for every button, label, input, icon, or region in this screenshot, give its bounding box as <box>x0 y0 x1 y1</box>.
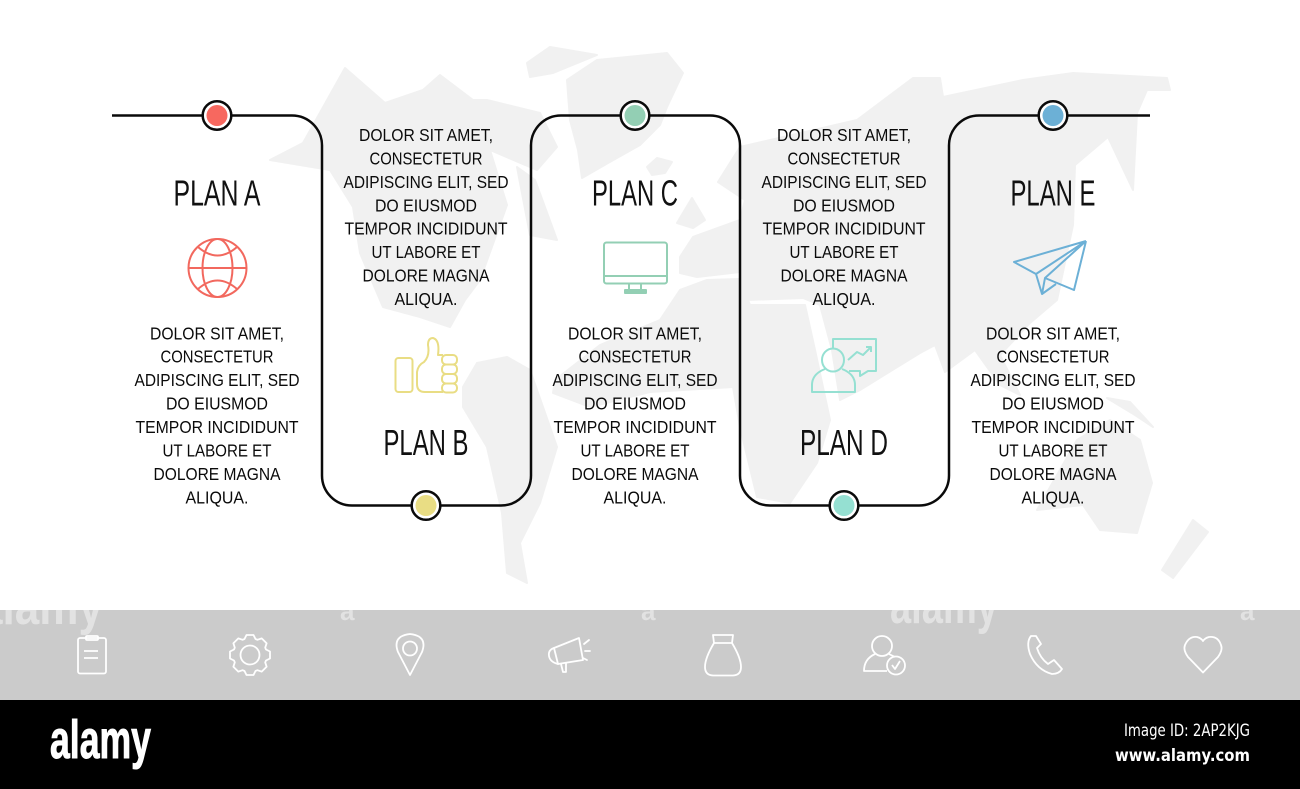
text block: plan C: ADIPISCING ELIT, SED <box>552 370 718 390</box>
text block: plan D: UT LABORE ET <box>790 242 899 262</box>
panel: plan B <box>344 125 508 520</box>
bottom icon band <box>0 610 1300 700</box>
icon: globe <box>188 239 246 297</box>
icon: heart <box>1184 637 1222 672</box>
text block: plan C: DOLOR SIT AMET, <box>568 323 702 343</box>
text block: plan E: UT LABORE ET <box>998 440 1108 460</box>
text block: plan B: ALIQUA. <box>394 289 458 309</box>
text block: plan A: CONSECTETUR <box>160 347 274 367</box>
text block: plan C: CONSECTETUR <box>578 347 692 367</box>
text block: plan A: DOLORE MAGNA <box>154 464 281 484</box>
text block: plan D: TEMPOR INCIDIDUNT <box>762 219 926 239</box>
icon: presenter with chart bubble <box>812 339 876 392</box>
text block: plan B: ADIPISCING ELIT, SED <box>344 172 508 192</box>
text block: plan E: DOLOR SIT AMET, <box>986 323 1120 343</box>
website: www.alamy.com <box>1115 746 1250 766</box>
text block: plan C: ALIQUA. <box>604 487 666 507</box>
text block: plan E: CONSECTETUR <box>996 347 1110 367</box>
footer bar <box>0 700 1300 789</box>
connecting timeline line <box>112 116 1150 506</box>
text block: plan B <box>344 125 508 309</box>
heading: plan E: PLAN E <box>1010 172 1096 214</box>
icon: gear <box>230 635 270 675</box>
icon: user with check <box>864 636 905 674</box>
icon: paper plane <box>1014 241 1086 294</box>
icon: phone <box>1028 636 1062 674</box>
marker: plan E <box>1039 101 1067 130</box>
icon: clipboard <box>78 636 106 674</box>
text block: plan D <box>762 125 926 309</box>
text block: plan D: DOLOR SIT AMET, <box>777 125 911 145</box>
text block: plan C: DO EIUSMOD <box>584 394 686 414</box>
heading: plan D: PLAN D <box>800 422 888 463</box>
watermark ghosts in band: alamy <box>890 577 998 635</box>
text block: plan D: ALIQUA. <box>812 289 876 309</box>
text block: plan A <box>134 323 300 507</box>
icon: thumbs up <box>396 338 457 392</box>
text block: plan E: TEMPOR INCIDIDUNT <box>972 417 1135 437</box>
text block: plan B: CONSECTETUR <box>370 148 482 168</box>
text block: plan E: ADIPISCING ELIT, SED <box>970 370 1136 390</box>
text block: plan A: ALIQUA. <box>186 487 248 507</box>
text block: plan B: DO EIUSMOD <box>375 195 477 215</box>
text block: plan D: DO EIUSMOD <box>793 195 895 215</box>
text block: plan B: DOLORE MAGNA <box>362 266 490 286</box>
icon: location pin <box>396 634 424 675</box>
heading: plan B: PLAN B <box>384 422 468 463</box>
logo: alamy: alamy <box>50 710 151 770</box>
watermark ghosts in band <box>0 610 1254 635</box>
text block: plan A: ADIPISCING ELIT, SED <box>134 370 300 390</box>
panel: plan D <box>762 125 926 520</box>
background world map <box>270 47 1208 583</box>
marker: plan D <box>830 491 858 520</box>
text block: plan A: TEMPOR INCIDIDUNT <box>136 417 299 437</box>
text block: plan E: DO EIUSMOD <box>1002 394 1104 414</box>
panel: plan A <box>134 101 300 507</box>
heading: plan C: PLAN C <box>592 172 678 214</box>
watermark ghosts in band: a <box>340 596 355 626</box>
text block: plan D: CONSECTETUR <box>788 148 900 168</box>
text block: plan B: UT LABORE ET <box>372 242 481 262</box>
icon: monitor <box>604 242 667 293</box>
text block: plan A: DOLOR SIT AMET, <box>150 323 284 343</box>
text block: plan D: ADIPISCING ELIT, SED <box>762 172 926 192</box>
text block: plan E: ALIQUA. <box>1022 487 1084 507</box>
text block: plan D: DOLORE MAGNA <box>780 266 908 286</box>
watermark ghosts in band: a <box>1240 596 1255 626</box>
text block: plan C <box>552 323 718 507</box>
text block: plan E <box>970 323 1136 507</box>
watermark ghosts in band: a <box>641 596 656 626</box>
text block: plan B: DOLOR SIT AMET, <box>359 125 493 145</box>
icon: money bag <box>705 635 741 676</box>
text block: plan C: TEMPOR INCIDIDUNT <box>554 417 717 437</box>
icon: megaphone <box>549 638 590 672</box>
text block: plan A: DO EIUSMOD <box>166 394 268 414</box>
text block: plan C: DOLORE MAGNA <box>572 464 699 484</box>
image id: Image ID: 2AP2KJG <box>1124 721 1250 740</box>
panel: plan E <box>970 101 1136 507</box>
marker: plan C <box>621 101 649 130</box>
panel: plan C <box>552 101 718 507</box>
text block: plan A: UT LABORE ET <box>162 440 272 460</box>
text block: plan C: UT LABORE ET <box>580 440 690 460</box>
marker: plan A <box>203 101 231 130</box>
text block: plan B: TEMPOR INCIDIDUNT <box>344 219 508 239</box>
heading: plan A: PLAN A <box>174 172 261 214</box>
marker: plan B <box>412 491 440 520</box>
text block: plan E: DOLORE MAGNA <box>990 464 1117 484</box>
